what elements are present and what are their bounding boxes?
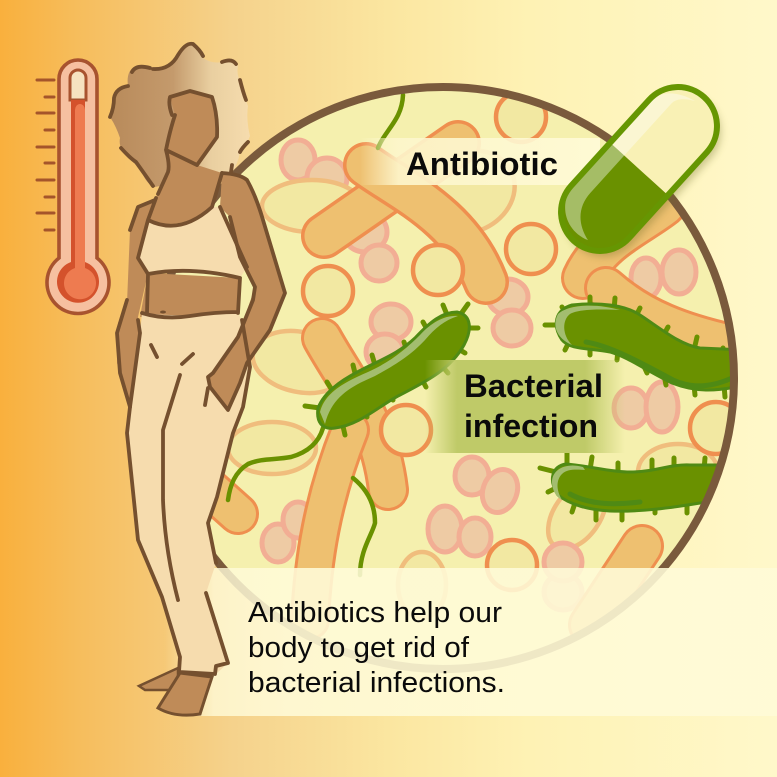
thermometer cream tube xyxy=(70,70,86,100)
bra xyxy=(138,207,247,278)
torso outline strokes xyxy=(130,173,247,317)
caption text: body to get rid of xyxy=(248,632,470,664)
arm outline strokes xyxy=(117,173,285,410)
left arm xyxy=(117,198,155,407)
green bacterium: lower right xyxy=(538,453,717,522)
body xyxy=(552,464,745,511)
thermometer tick marks xyxy=(37,80,54,230)
icon: antibiotic capsule xyxy=(545,71,737,273)
capsule body xyxy=(545,71,733,267)
spikes xyxy=(305,304,478,435)
back foot xyxy=(139,668,178,690)
capsule shadow xyxy=(549,77,737,273)
label background: bacterial infection xyxy=(425,360,625,453)
panel: caption background strip xyxy=(165,568,777,716)
circle outline xyxy=(152,87,734,669)
navel xyxy=(160,310,166,314)
dark stripe xyxy=(570,494,640,504)
second-layer pink cell xyxy=(542,540,584,568)
figure: woman xyxy=(110,43,285,715)
thermometer mercury xyxy=(57,100,99,303)
label: Bacterial infection xyxy=(464,368,603,444)
front foot xyxy=(158,673,212,715)
neck and shoulders xyxy=(148,148,222,224)
green bacterium: centre xyxy=(305,304,478,435)
orange rod bacteria xyxy=(200,143,745,625)
pants outline strokes xyxy=(127,320,250,674)
green bacterium: upper right xyxy=(545,297,745,397)
highlight xyxy=(552,465,585,500)
label background: antibiotic xyxy=(360,138,600,185)
pale oval cells xyxy=(228,135,718,618)
spikes xyxy=(545,297,725,397)
dark stripe xyxy=(586,342,732,386)
spikes xyxy=(540,452,705,520)
midriff xyxy=(140,273,240,317)
right arm xyxy=(208,173,285,410)
caption text xyxy=(248,597,505,699)
flagella xyxy=(228,95,403,575)
bacteria field xyxy=(200,92,745,625)
thermometer body xyxy=(47,60,109,313)
hair outline strokes xyxy=(110,44,248,186)
pants xyxy=(128,312,250,674)
hair xyxy=(110,43,250,187)
panel: magnified bacteria circle xyxy=(152,87,745,669)
body xyxy=(318,312,469,428)
face xyxy=(167,91,217,165)
label: Bacterial infection: Bacterial xyxy=(464,368,603,404)
label: Bacterial infection: infection xyxy=(464,408,598,444)
caption text: Antibiotics help our xyxy=(248,597,502,629)
pink paired cells xyxy=(262,140,696,610)
face and neck outline strokes xyxy=(158,91,217,194)
highlight xyxy=(320,316,458,424)
caption text: bacterial infections. xyxy=(248,667,505,699)
body xyxy=(556,304,745,390)
label: Antibiotic: Antibiotic xyxy=(406,146,558,182)
round cells xyxy=(303,92,742,590)
icon: thermometer xyxy=(37,60,109,313)
highlight xyxy=(555,306,620,345)
